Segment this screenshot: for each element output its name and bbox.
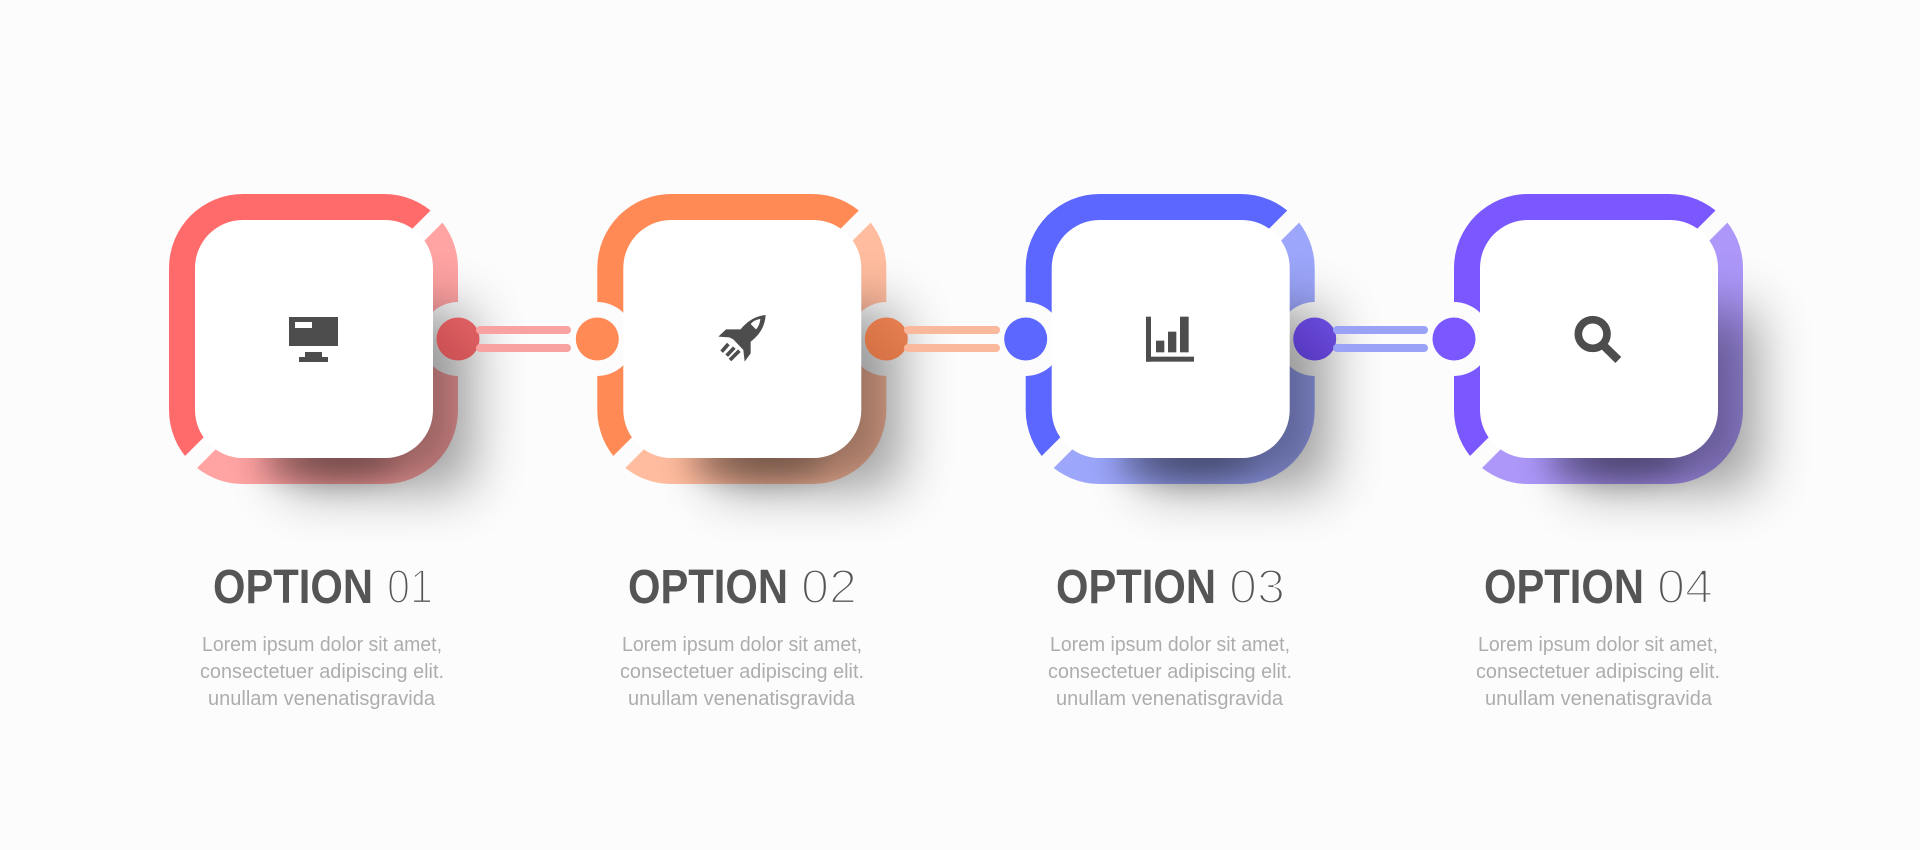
icon: monitor: [289, 317, 338, 362]
connector nodes: left and right: [576, 318, 908, 360]
white card: [195, 220, 433, 458]
connector: double bars option 1 to 2: [476, 326, 571, 352]
connector: double bars option 2 to 3: [904, 326, 1000, 352]
white card: [1480, 220, 1718, 458]
text block: option 03: unullam venenatisgravida: [1056, 688, 1284, 710]
text block: option 02: consectetuer adipiscing elit.: [620, 661, 864, 683]
ring: top-left strong segment: [1026, 194, 1288, 456]
drop shadow: [1117, 310, 1327, 487]
heading: option 01: OPTION: [213, 561, 373, 614]
connector: double bars option 3 to 4: [1333, 326, 1428, 352]
panel: option 4 diagram: [1417, 194, 1755, 487]
text block: option 03: consectetuer adipiscing elit.: [1048, 661, 1292, 683]
text block: option 01: [200, 634, 444, 710]
ring: bottom-right light segment: [1054, 222, 1315, 484]
connector halos: left and right: [989, 302, 1352, 376]
text block: option 01: consectetuer adipiscing elit.: [200, 661, 444, 683]
text block: option 02: Lorem ipsum dolor sit amet,: [622, 634, 862, 656]
heading: option 04: OPTION: [1484, 561, 1644, 614]
drop shadow: [1545, 310, 1755, 487]
connector halos: left and right: [560, 302, 923, 376]
heading: option 02: OPTION: [628, 561, 788, 614]
icon: rocket: [718, 315, 766, 362]
connector halo: right: [421, 302, 495, 376]
text block: option 04: Lorem ipsum dolor sit amet,: [1478, 634, 1718, 656]
text block: option 04: consectetuer adipiscing elit.: [1476, 661, 1720, 683]
ring: bottom-right light segment: [197, 222, 458, 484]
text block: option 04: [1476, 634, 1720, 710]
text block: option 02: [620, 634, 864, 710]
heading: option 02: 02: [801, 561, 857, 614]
text block: option 01: Lorem ipsum dolor sit amet,: [202, 634, 442, 656]
ring: top-left strong segment: [1454, 194, 1716, 456]
drop shadow: [260, 310, 470, 487]
ring: top-left strong segment: [597, 194, 859, 456]
white card: [1052, 220, 1290, 458]
text block: option 02: unullam venenatisgravida: [628, 688, 856, 710]
heading: option 04: 04: [1657, 561, 1713, 614]
heading: option 03: 03: [1229, 561, 1285, 614]
drop shadow: [688, 310, 898, 487]
ring: top-left strong segment: [169, 194, 430, 456]
panel: option 2 diagram: [560, 194, 923, 487]
connector node: left: [1432, 318, 1476, 360]
connector nodes: left and right: [1004, 318, 1336, 360]
heading: option 03: OPTION: [1056, 561, 1216, 614]
ring: bottom-right light segment: [625, 222, 886, 484]
white card: [623, 220, 861, 458]
icon: bar chart: [1146, 317, 1194, 362]
connector halo: left: [1417, 302, 1491, 376]
text block: option 01: unullam venenatisgravida: [208, 688, 436, 710]
text block: option 03: Lorem ipsum dolor sit amet,: [1050, 634, 1290, 656]
panel: option 1 diagram: [169, 194, 495, 487]
connector node: right: [436, 318, 480, 360]
ring: bottom-right light segment: [1482, 222, 1743, 484]
heading: option 01: 01: [387, 561, 433, 614]
icon: magnifier: [1578, 320, 1618, 360]
text block: option 04: unullam venenatisgravida: [1485, 688, 1713, 710]
panel: option 3 diagram: [989, 194, 1352, 487]
text block: option 03: [1048, 634, 1292, 710]
